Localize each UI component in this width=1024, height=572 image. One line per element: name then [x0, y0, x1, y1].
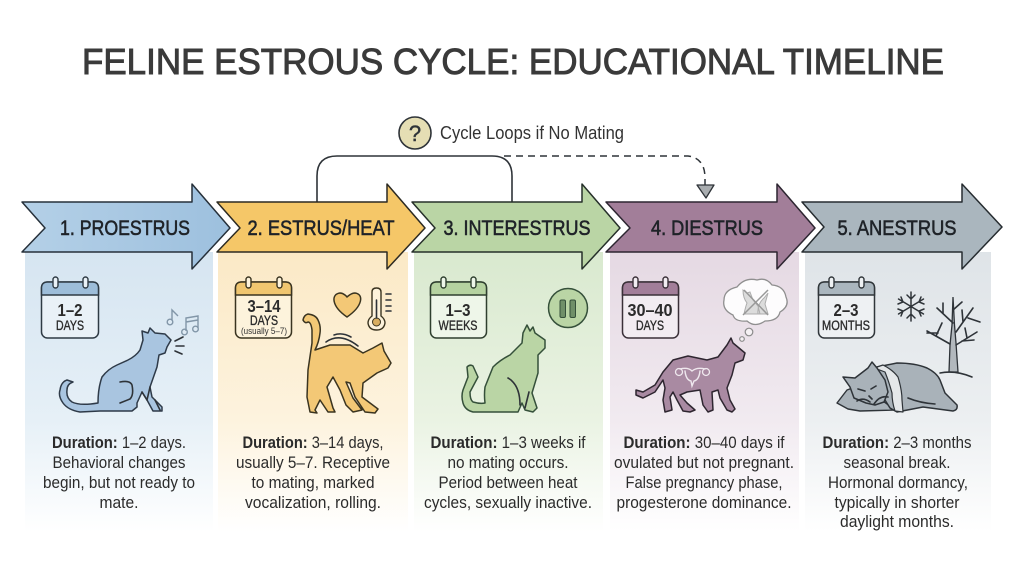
calendar: 1-3 weeks: WEEKS — [438, 318, 478, 333]
text: anestrus description — [822, 434, 972, 531]
text: interestrus description: cycles, sexually inactive. — [424, 494, 592, 512]
text: anestrus description: daylight months. — [840, 513, 954, 531]
text: proestrus description — [43, 434, 195, 512]
text: estrus description: Duration: 3–14 days, — [242, 434, 384, 452]
text: diestrus description — [614, 434, 794, 512]
text: diestrus description: False pregnancy phase, — [626, 474, 782, 492]
calendar: 30-40 days — [622, 277, 678, 338]
text: interestrus description: Period between heat — [438, 474, 578, 492]
text: diestrus description: progesterone dominance. — [616, 494, 792, 512]
dashed arrow to diestrus — [504, 156, 714, 198]
arrow: 3 interestrus — [412, 184, 620, 269]
text: estrus description: to mating, marked — [252, 474, 374, 492]
text: interestrus description — [424, 434, 592, 512]
calendar: 1-2 days: DAYS — [56, 318, 84, 333]
panel: proestrus background — [25, 252, 213, 532]
calendar: 1-2 days — [42, 277, 98, 338]
calendar: 3-14 days: DAYS — [250, 313, 278, 328]
icon: snowflake — [898, 292, 924, 321]
loop label with question icon — [399, 117, 624, 149]
text: interestrus description: no mating occurs. — [448, 454, 568, 472]
cat: standing mauve with uterus — [636, 338, 745, 412]
text: proestrus description: Behavioral changes — [52, 454, 186, 472]
calendar: 3-14 days: 3–14 — [248, 296, 281, 316]
cycle loop connector — [317, 156, 512, 203]
cat: sleeping under blanket — [837, 362, 957, 412]
text: proestrus description: mate. — [100, 494, 138, 512]
panel: estrus background — [218, 252, 408, 532]
cat: arched amber — [303, 314, 391, 413]
arrow: 1 proestrus: 1. PROESTRUS — [60, 216, 190, 240]
text: diestrus description: ovulated but not pregnant. — [614, 454, 794, 472]
loop label with question icon: Cycle Loops if No Mating — [440, 122, 624, 143]
cat: sitting green — [462, 325, 545, 412]
panel: diestrus background — [610, 252, 799, 532]
calendar: 2-3 months: MONTHS — [822, 318, 870, 333]
cat: vocalizing blue — [59, 328, 171, 412]
text: anestrus description: Hormonal dormancy, — [828, 474, 968, 492]
calendar: 30-40 days: DAYS — [636, 318, 664, 333]
panel: anestrus background — [805, 252, 991, 532]
text: estrus description — [236, 434, 390, 512]
text: anestrus description: typically in shorter — [834, 494, 960, 512]
arrow: 4 diestrus: 4. DIESTRUS — [651, 216, 763, 240]
calendar: 3-14 days — [236, 277, 292, 338]
calendar: 2-3 months: 2–3 — [834, 300, 859, 320]
icon: pause — [548, 288, 588, 328]
icon: thermometer — [368, 288, 391, 330]
calendar: 1-3 weeks — [430, 277, 486, 338]
text: estrus description: vocalization, rolling. — [245, 494, 381, 512]
title: FELINE ESTROUS CYCLE: EDUCATIONAL TIMELINE — [82, 41, 944, 82]
calendar: 2-3 months — [818, 277, 874, 338]
arrow: 5 anestrus: 5. ANESTRUS — [838, 216, 956, 240]
arrow: 3 interestrus: 3. INTERESTRUS — [444, 216, 590, 240]
text: anestrus description: seasonal break. — [844, 454, 950, 472]
arrow: 5 anestrus — [802, 184, 1002, 269]
text: estrus description: usually 5–7. Receptive — [236, 454, 390, 472]
arrow: 4 diestrus — [606, 184, 815, 269]
sound lines and music notes — [167, 310, 198, 354]
panel: interestrus background — [414, 252, 603, 532]
calendar: 30-40 days: 30–40 — [628, 300, 673, 320]
arrow: 2 estrus/heat — [217, 184, 425, 269]
text: anestrus description: Duration: 2–3 months — [822, 434, 972, 452]
loop label with question icon: ? — [409, 121, 421, 146]
text: proestrus description: begin, but not ready to — [43, 474, 195, 492]
icon: bare tree — [927, 297, 980, 377]
calendar: 1-3 weeks: 1–3 — [446, 300, 471, 320]
calendar: 1-2 days: 1–2 — [58, 300, 83, 320]
arrow: 1 proestrus — [22, 184, 230, 269]
text: proestrus description: Duration: 1–2 days. — [52, 434, 186, 452]
arrow: 2 estrus/heat: 2. ESTRUS/HEAT — [248, 216, 394, 240]
text: interestrus description: Duration: 1–3 weeks if — [430, 434, 586, 452]
text: diestrus description: Duration: 30–40 days if — [624, 434, 785, 452]
icon: heart — [334, 293, 361, 317]
calendar: 3-14 days: (usually 5–7) — [241, 326, 287, 337]
thought bubble with crossed cats — [724, 279, 787, 341]
